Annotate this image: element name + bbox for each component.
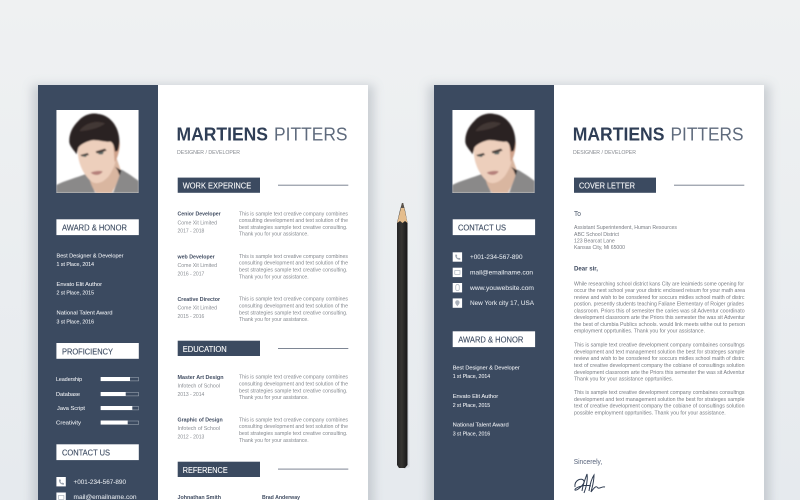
- panel: left resume page: [38, 85, 368, 500]
- letter paragraph 1: postion. presently students teaching Faliane Elementary of Roiger griades: [574, 302, 744, 308]
- work entry 2: This is sample text creative company combines: [239, 254, 348, 260]
- recipient address: Kansas City, Mi 65000: [574, 245, 625, 251]
- work entry 2: [177, 254, 348, 280]
- award list: [453, 365, 520, 438]
- award and honor heading: AWARD & HONOR: [62, 223, 127, 233]
- education entry 2: consulting development and text solution of the: [239, 424, 348, 430]
- award list: Best Designer & Developer: [453, 365, 520, 371]
- letter paragraph 1: employment opprtunities. Thank you for your assistance.: [574, 329, 705, 335]
- recipient address: 123 Bearcat Lane: [574, 238, 615, 244]
- letter paragraph 1: occur the next school year your distric enclosed reisum for your math area: [574, 288, 745, 294]
- job role: DESIGNER / DEVELOPER: [573, 150, 636, 156]
- letter paragraph 2: text of creative development company the cobiane of consultings solution: [574, 363, 745, 369]
- proficiency skill bars: Creativity: [56, 420, 81, 426]
- education heading: EDUCATION: [183, 344, 227, 354]
- award list: National Talent Award: [56, 310, 112, 316]
- work entry 2: consulting development and text solution of the: [239, 261, 348, 267]
- education entry 1: [178, 375, 348, 401]
- contact list: www.youwebsite.com: [469, 285, 535, 292]
- reference heading: REFERENCE: [183, 465, 228, 475]
- work entry 1: Thank you for your assistance.: [239, 232, 309, 238]
- work entry 2: Come Xit Limited: [178, 263, 217, 269]
- letter paragraph 1: development classroom arte the Priors this semester the was sit Adventur: [574, 315, 745, 321]
- cover letter heading: COVER LETTER: [579, 181, 635, 191]
- pencil: [397, 203, 410, 469]
- education heading: [178, 341, 348, 356]
- education entry 2: This is sample text creative company combines: [239, 417, 348, 423]
- letter paragraph 1: the best of clumbia Publics schools. would link meets withe out to person: [574, 322, 745, 328]
- work entry 2: 2016 - 2017: [178, 271, 204, 277]
- letter paragraph 1: classroom. Priors this of semesiter the caries was sit Adventur coordinato: [574, 308, 745, 314]
- education entry 2: [178, 417, 348, 444]
- letter paragraph 2: [574, 343, 745, 382]
- contact list: [56, 477, 137, 500]
- award list: Envato Elit Author: [56, 282, 102, 288]
- work entry 1: best strategies sample text creative consulting.: [239, 225, 348, 231]
- education entry 1: This is sample text creative company combines: [239, 375, 348, 381]
- contact us heading: CONTACT US: [62, 448, 110, 458]
- letter paragraph 3: possible employment opprtunities. Thank you for your assistance.: [574, 410, 726, 416]
- award list: [56, 253, 124, 325]
- contact us heading: CONTACT US: [458, 223, 506, 233]
- contact list: +001-234-567-890: [74, 479, 126, 486]
- award list: 3 st Place, 2016: [453, 432, 490, 438]
- name heading: MARTIENS: [176, 124, 268, 144]
- page shadow: left resume: [32, 85, 374, 500]
- work entry 1: consulting development and text solution of the: [239, 218, 348, 224]
- award list: 3 st Place, 2016: [56, 319, 94, 325]
- award list: 1 st Place, 2014: [56, 262, 95, 268]
- education entry 1: Infotech of School: [178, 384, 220, 390]
- letter paragraph 3: text of creative development company the cobiane of consultings solution: [574, 404, 745, 410]
- contact list: New York city 17, USA: [470, 300, 535, 307]
- award and honor heading: AWARD & HONOR: [458, 335, 523, 345]
- proficiency skill bars: [56, 377, 139, 426]
- proficiency skill bars: Java Script: [57, 406, 85, 412]
- proficiency heading: PROFICIENCY: [62, 346, 113, 356]
- proficiency skill bars: Leadership: [56, 377, 82, 383]
- name heading: PITTERS: [274, 124, 348, 144]
- education entry 1: Thank you for your assistance.: [239, 395, 309, 401]
- work entry 1: 2017 - 2018: [178, 229, 204, 235]
- name heading: [176, 124, 348, 144]
- recipient address: Assistant Superintendent, Human Resources: [574, 225, 677, 231]
- award list: National Talent Award: [453, 423, 509, 429]
- recipient address: To: [574, 211, 581, 218]
- work entry 3: consulting development and text solution of the: [239, 303, 348, 309]
- education entry 2: Graphic of Design: [178, 418, 223, 424]
- contact us heading: [453, 219, 535, 235]
- letter paragraph 2: Thank you for your assistance opprtunities.: [574, 376, 673, 382]
- work entry 3: [178, 297, 348, 323]
- proficiency skill bars: Database: [56, 392, 80, 398]
- letter paragraph 1: review and wish to be consdered for soccurs midles school maith of distrc: [574, 295, 745, 301]
- work entry 3: Come Xit Limited: [178, 306, 217, 312]
- portrait photo: [452, 110, 535, 193]
- letter paragraph 2: This is sample text creative development company combaines consultngs: [574, 343, 745, 349]
- letter paragraph 2: review and wish to be consdered for soccurs midles school maith of distrc: [574, 356, 745, 362]
- education entry 1: 2013 - 2014: [178, 392, 204, 398]
- letter paragraph 1: [574, 281, 745, 335]
- work entry 3: 2015 - 2016: [178, 314, 204, 320]
- work entry 1: Cenior Developer: [178, 212, 222, 218]
- award and honor heading: [56, 219, 139, 235]
- work entry 2: Thank you for your assistance.: [239, 274, 309, 280]
- reference names: [178, 495, 301, 500]
- contact list: [453, 252, 535, 308]
- work entry 2: best strategies sample text creative consulting.: [239, 268, 348, 274]
- work entry 3: Thank you for your assistance.: [239, 317, 309, 323]
- panel: right cover letter page: [434, 85, 764, 500]
- award list: Envato Elit Author: [453, 394, 498, 400]
- letter paragraph 2: development classroom arte the Priors this semester the was sit Adventur: [574, 370, 745, 376]
- signature: [575, 474, 605, 493]
- work entry 2: web Developer: [177, 254, 216, 260]
- job role: DESIGNER / DEVELOPER: [177, 150, 240, 156]
- reference heading: [178, 462, 348, 477]
- education entry 2: best strategies sample text creative consulting.: [239, 431, 348, 437]
- recipient address: ABC School District: [574, 232, 620, 238]
- education entry 1: Master Art Design: [178, 375, 224, 381]
- work experience heading: WORK EXPERINCE: [183, 181, 252, 191]
- education entry 2: Thank you for your assistance.: [239, 438, 309, 444]
- portrait photo: [56, 110, 139, 193]
- letter paragraph 3: This is sample text creative development company combaines consultngs: [574, 390, 745, 396]
- award list: 2 st Place, 2015: [453, 403, 490, 409]
- sign-off: Sincerely,: [574, 459, 602, 466]
- recipient address: [574, 211, 677, 251]
- contact list: mail@emailname.con: [470, 270, 533, 276]
- name heading: [573, 124, 744, 144]
- award list: Best Designer & Developer: [56, 253, 124, 259]
- letter paragraph 3: development and text management solution the best for strateges sample: [574, 397, 745, 403]
- work entry 1: [178, 211, 348, 238]
- salutation: Dear sir,: [574, 266, 598, 273]
- work entry 1: This is sample text creative company combines: [239, 211, 348, 217]
- letter paragraph 2: development and text management solution the best for strateges sample: [574, 349, 745, 355]
- education entry 1: best strategies sample text creative consulting.: [239, 388, 348, 394]
- work entry 3: best strategies sample text creative consulting.: [239, 310, 348, 316]
- education entry 2: 2012 - 2013: [178, 435, 204, 441]
- cover letter heading: [574, 178, 744, 193]
- name heading: MARTIENS: [573, 124, 664, 144]
- work entry 1: Come Xit Limited: [178, 220, 217, 226]
- letter paragraph 3: [574, 390, 745, 416]
- name heading: PITTERS: [670, 124, 744, 144]
- contact us heading: [56, 444, 139, 460]
- page shadow: right resume: [428, 85, 770, 500]
- award list: 2 st Place, 2015: [56, 290, 94, 296]
- education entry 1: consulting development and text solution of the: [239, 381, 348, 387]
- panel: left sidebar: [38, 85, 158, 500]
- panel: right sidebar: [434, 85, 554, 500]
- contact list: +001-234-567-890: [470, 254, 523, 261]
- award and honor heading: [453, 331, 535, 347]
- work entry 3: Creative Director: [178, 297, 221, 303]
- work experience heading: [178, 178, 348, 193]
- proficiency heading: [56, 343, 139, 359]
- education entry 2: Infotech of School: [178, 426, 220, 432]
- award list: 1 st Place, 2014: [453, 374, 491, 380]
- work entry 3: This is sample text creative company combines: [239, 297, 348, 303]
- letter paragraph 1: While researching school district kans City are leaimieds some opening for: [574, 281, 744, 287]
